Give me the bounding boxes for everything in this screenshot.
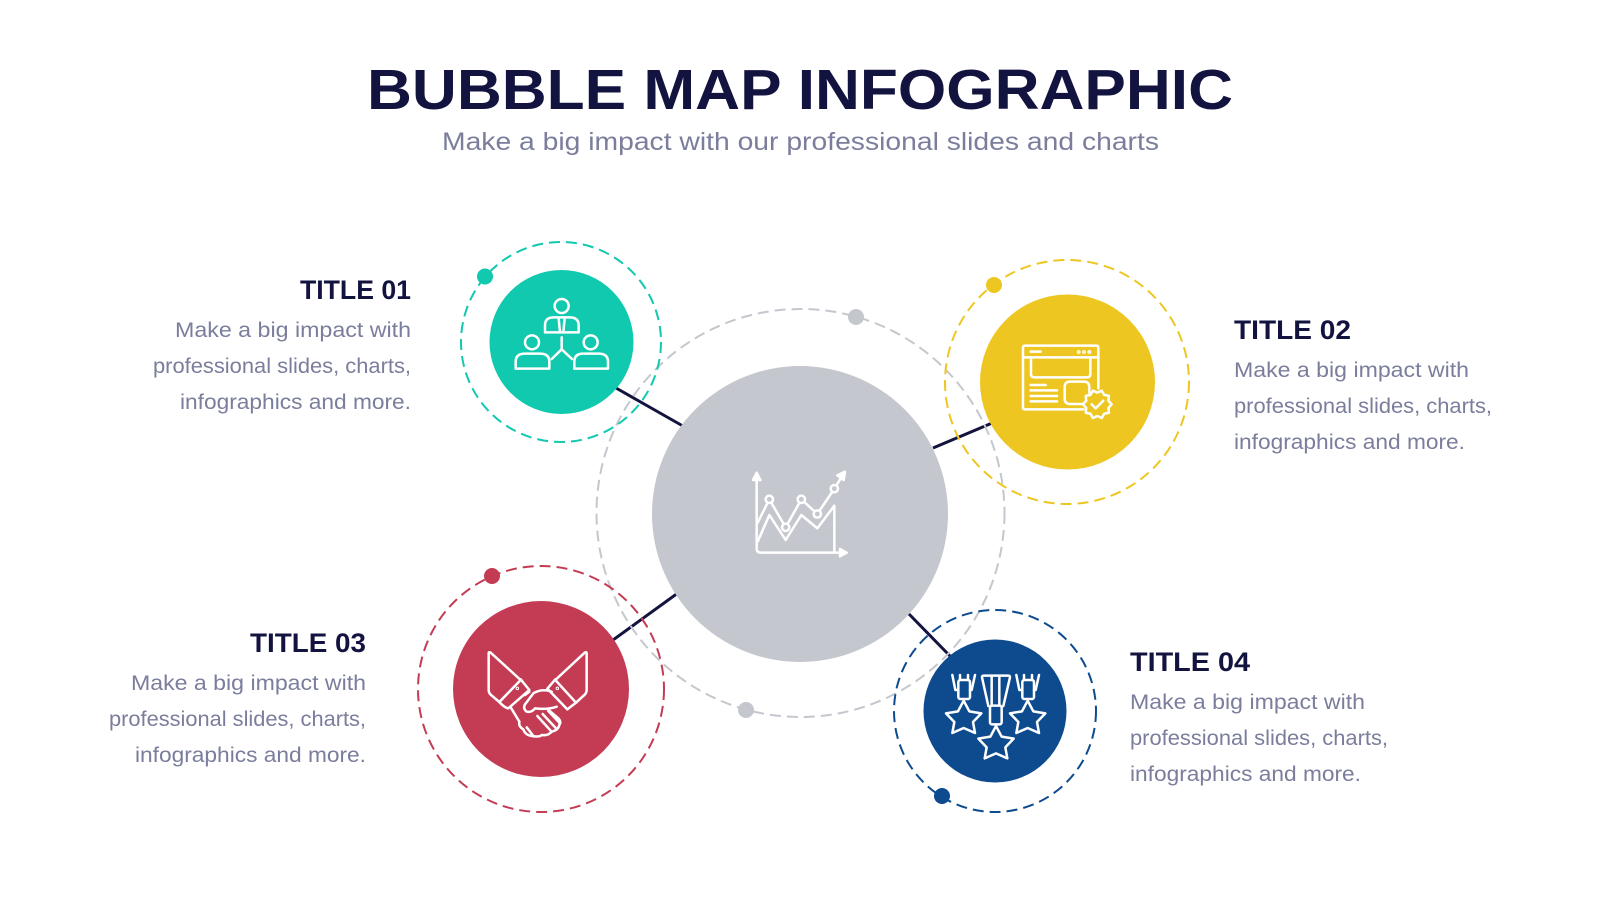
connector: center to title 01 [616,388,682,426]
text block: title 02 [1234,315,1492,454]
body: title 04 [1130,691,1388,786]
bubble: title 02 [945,260,1189,504]
body: title 02: professional slides, charts, [1234,395,1492,418]
body: title 01: infographics and more. [180,391,411,414]
bubble: title 03 [418,566,664,812]
icon: medals [946,675,1045,758]
title: BUBBLE MAP INFOGRAPHIC [367,58,1233,122]
icon: line chart [753,472,847,556]
body: title 03: infographics and more. [135,744,366,767]
body: title 01: professional slides, charts, [153,355,411,378]
body: title 02: Make a big impact with [1234,359,1469,382]
body: title 03 [109,672,366,767]
text block: title 01 [153,275,411,414]
subtitle: Make a big impact with our professional slides and charts [442,128,1159,156]
body: title 03: Make a big impact with [131,672,366,695]
body: title 01: Make a big impact with [175,319,411,342]
text block: title 04 [1130,647,1388,786]
body: title 03: professional slides, charts, [109,708,366,731]
heading: title 04: TITLE 04 [1130,647,1250,677]
icon: team hierarchy [516,299,608,369]
body: title 01 [153,319,411,414]
central bubble [596,309,1004,718]
icon: handshake [489,652,587,736]
body: title 04: infographics and more. [1130,763,1361,786]
icon: web page with badge [1023,346,1112,418]
body: title 04: professional slides, charts, [1130,727,1388,750]
connector: center to title 02 [933,424,991,448]
heading: title 03: TITLE 03 [250,628,366,658]
body: title 02 [1234,359,1492,454]
connector: center to title 04 [908,613,950,656]
heading: title 02: TITLE 02 [1234,315,1351,345]
body: title 02: infographics and more. [1234,431,1465,454]
connector: center to title 03 [613,594,676,640]
body: title 04: Make a big impact with [1130,691,1365,714]
bubble: title 04 [894,610,1096,812]
text block: title 03 [109,628,366,767]
bubble: title 01 [461,242,661,442]
heading: title 01: TITLE 01 [300,275,411,305]
